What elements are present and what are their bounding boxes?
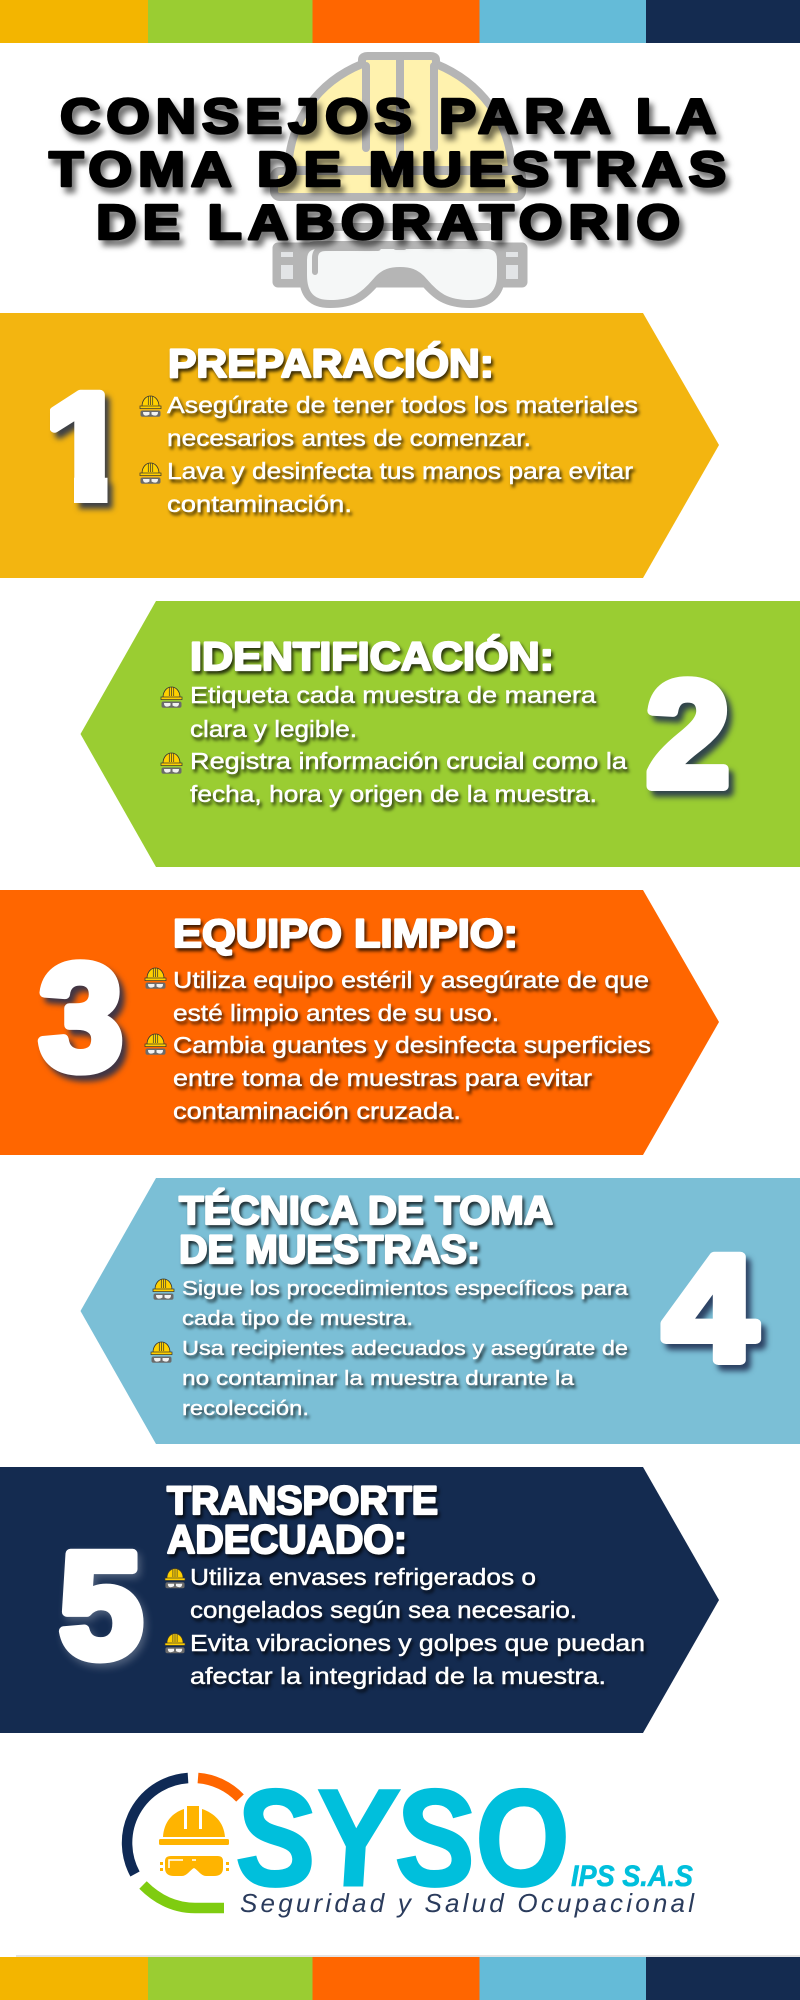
bullet text: Utiliza envases refrigerados o [190,1564,536,1590]
logo: SYSO IPS S.A.S [127,1762,695,1918]
logo wordmark: SYSO [227,1762,575,1915]
number 2: 2 [646,650,730,818]
title [49,90,732,250]
number 5: 5 [59,1521,143,1689]
bullet text: Cambia guantes y desinfecta superficies [173,1032,651,1058]
bullet text [190,682,627,807]
bullet text: Utiliza equipo estéril y asegúrate de que [173,967,649,993]
panel 5: transporte adecuado [0,1467,719,1733]
heading: tecnica de toma de muestras: DE MUESTRAS: [179,1228,480,1272]
bullet text: Lava y desinfecta tus manos para evitar [167,458,633,484]
heading: tecnica de toma de muestras [179,1188,553,1272]
logo helmet and goggles [159,1806,229,1876]
bottom colour bar [0,1955,800,2000]
heading: transporte adecuado: TRANSPORTE [167,1479,438,1523]
panel 3 background [0,890,719,1155]
panel 4 background [80,1178,800,1444]
bullet text: Etiqueta cada muestra de manera [190,682,596,708]
bullet icons [165,1568,185,1653]
heading: transporte adecuado [167,1479,438,1562]
bullet icons [145,968,166,1055]
bullet text: fecha, hora y origen de la muestra. [190,781,597,807]
background icon: hard hat and goggles [274,56,525,304]
bullet text: Usa recipientes adecuados y asegúrate de [182,1338,628,1360]
bullet text [190,1564,645,1689]
bullet text: esté limpio antes de su uso. [173,1000,499,1026]
logo tagline: Seguridad y Salud Ocupacional [240,1888,695,1918]
panel 1 background [0,313,719,578]
bullet text [182,1278,629,1420]
number 4: 4 [664,1224,756,1392]
bullet text: no contaminar la muestra durante la [182,1368,575,1390]
title: TOMA DE MUESTRAS [49,143,732,197]
bullet icons [161,687,182,774]
bullet text: necesarios antes de comenzar. [167,425,531,451]
panel 2 background [80,601,800,867]
heading: transporte adecuado: ADECUADO: [167,1518,407,1562]
title: CONSEJOS PARA LA [60,90,722,144]
bullet text: entre toma de muestras para evitar [173,1065,592,1091]
bullet text [173,967,651,1124]
title: DE LABORATORIO [96,196,686,250]
bullet text: clara y legible. [190,716,357,742]
heading: tecnica de toma de muestras: TÉCNICA DE TOMA [179,1188,553,1233]
top colour bar [0,0,800,43]
bullet text: Asegúrate de tener todos los materiales [167,392,638,418]
bullet text: contaminación. [167,491,352,517]
heading: identificacion: IDENTIFICACIÓN: [190,633,554,679]
logo suffix: IPS S.A.S [571,1860,693,1893]
bullet text: Sigue los procedimientos específicos para [182,1278,629,1300]
bullet text [167,392,638,517]
logo ring [127,1778,240,1908]
bullet text: Evita vibraciones y golpes que puedan [190,1630,645,1656]
number 3: 3 [39,933,123,1101]
bullet text: contaminación cruzada. [173,1098,461,1124]
bullet text: congelados según sea necesario. [190,1597,577,1623]
heading: preparacion: PREPARACIÓN: [168,340,494,386]
panel 2: identificacion [80,601,800,867]
panel 5 background [0,1467,719,1733]
bullet text: Registra información crucial como la [190,748,627,774]
bullet text: recolección. [182,1398,309,1420]
bullet text: afectar la integridad de la muestra. [190,1663,606,1689]
panel 1: preparacion [0,313,719,578]
bullet icons [151,1279,174,1363]
bullet icons [140,396,161,484]
bullet text: cada tipo de muestra. [182,1308,413,1330]
number 1: 1 [44,362,128,530]
panel 4: tecnica de toma de muestras [80,1178,800,1444]
panel 3: equipo limpio [0,890,719,1155]
heading: equipo limpio: EQUIPO LIMPIO: [173,912,518,956]
